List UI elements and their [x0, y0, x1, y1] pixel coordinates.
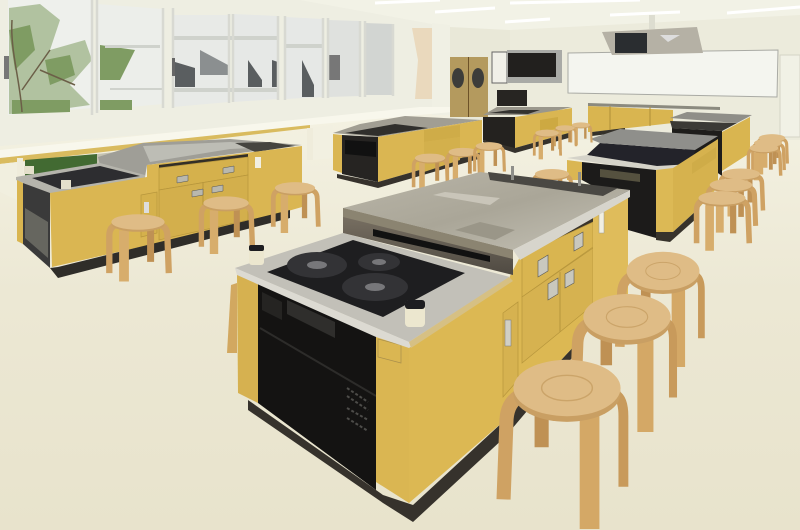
condiment jars [249, 245, 264, 265]
whiteboard [568, 50, 778, 97]
counter surface [235, 233, 510, 342]
left island [16, 139, 302, 278]
outside building [105, 36, 323, 92]
oven front [258, 283, 376, 490]
stainless cover [343, 172, 630, 250]
middle left island [333, 116, 482, 188]
stools left island [109, 182, 318, 282]
curtain [412, 28, 432, 99]
stools behind back islands [414, 122, 592, 192]
front main island [235, 166, 630, 522]
right cabinet face [409, 193, 628, 503]
frames [92, 0, 393, 115]
front corner panel [376, 333, 409, 503]
tree [9, 4, 135, 114]
rear door [780, 55, 800, 137]
right middle island [567, 129, 718, 242]
double door [450, 57, 488, 117]
front stools [504, 252, 701, 529]
ceiling [0, 0, 800, 45]
gas hob [267, 240, 465, 317]
back wall [432, 15, 800, 140]
under cover backsplash [343, 208, 513, 275]
toe kick [248, 343, 577, 522]
center back island [483, 107, 572, 153]
left yellow side [237, 273, 258, 403]
window counter [0, 107, 452, 200]
stools right side [697, 134, 787, 251]
stool hidden behind main island [534, 169, 572, 212]
sink [488, 172, 618, 196]
ceiling demonstration mirror [602, 15, 703, 55]
right back island [670, 112, 752, 176]
far back island [588, 103, 720, 136]
window wall [0, 0, 432, 146]
stool behind main island [227, 283, 237, 353]
wall monitor [492, 50, 562, 106]
